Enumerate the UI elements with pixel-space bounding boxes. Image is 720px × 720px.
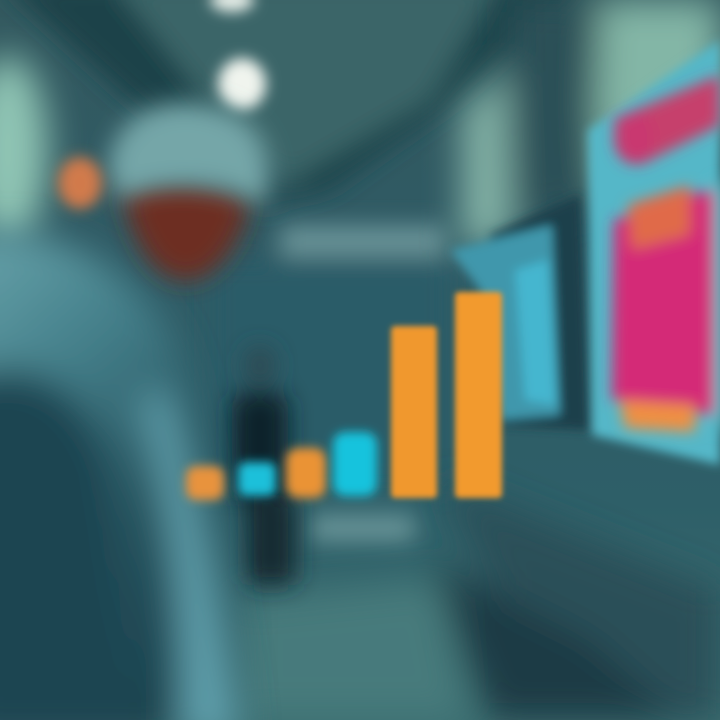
display graphics [612, 75, 720, 432]
bar 5 [391, 326, 437, 498]
left wall glow [0, 55, 48, 245]
bar chart [186, 292, 502, 500]
bar 3 [286, 448, 326, 498]
bar 6 [455, 292, 502, 498]
surgeon face [122, 181, 250, 280]
floor and bench [240, 480, 720, 720]
right wall [462, 0, 720, 250]
distant person [232, 347, 296, 585]
surgeon cap [108, 103, 270, 208]
far corridor panel [210, 226, 450, 540]
bar 4 [333, 432, 377, 496]
ceiling lights [210, 0, 266, 110]
bar 2 [238, 462, 276, 496]
large wall display [588, 40, 720, 465]
ceiling [0, 0, 590, 210]
foreground surgeon [0, 55, 270, 720]
surgeon body [0, 233, 245, 720]
small monitor panel [450, 195, 590, 430]
bar 1 [186, 466, 224, 500]
orange ear accent [58, 157, 102, 209]
